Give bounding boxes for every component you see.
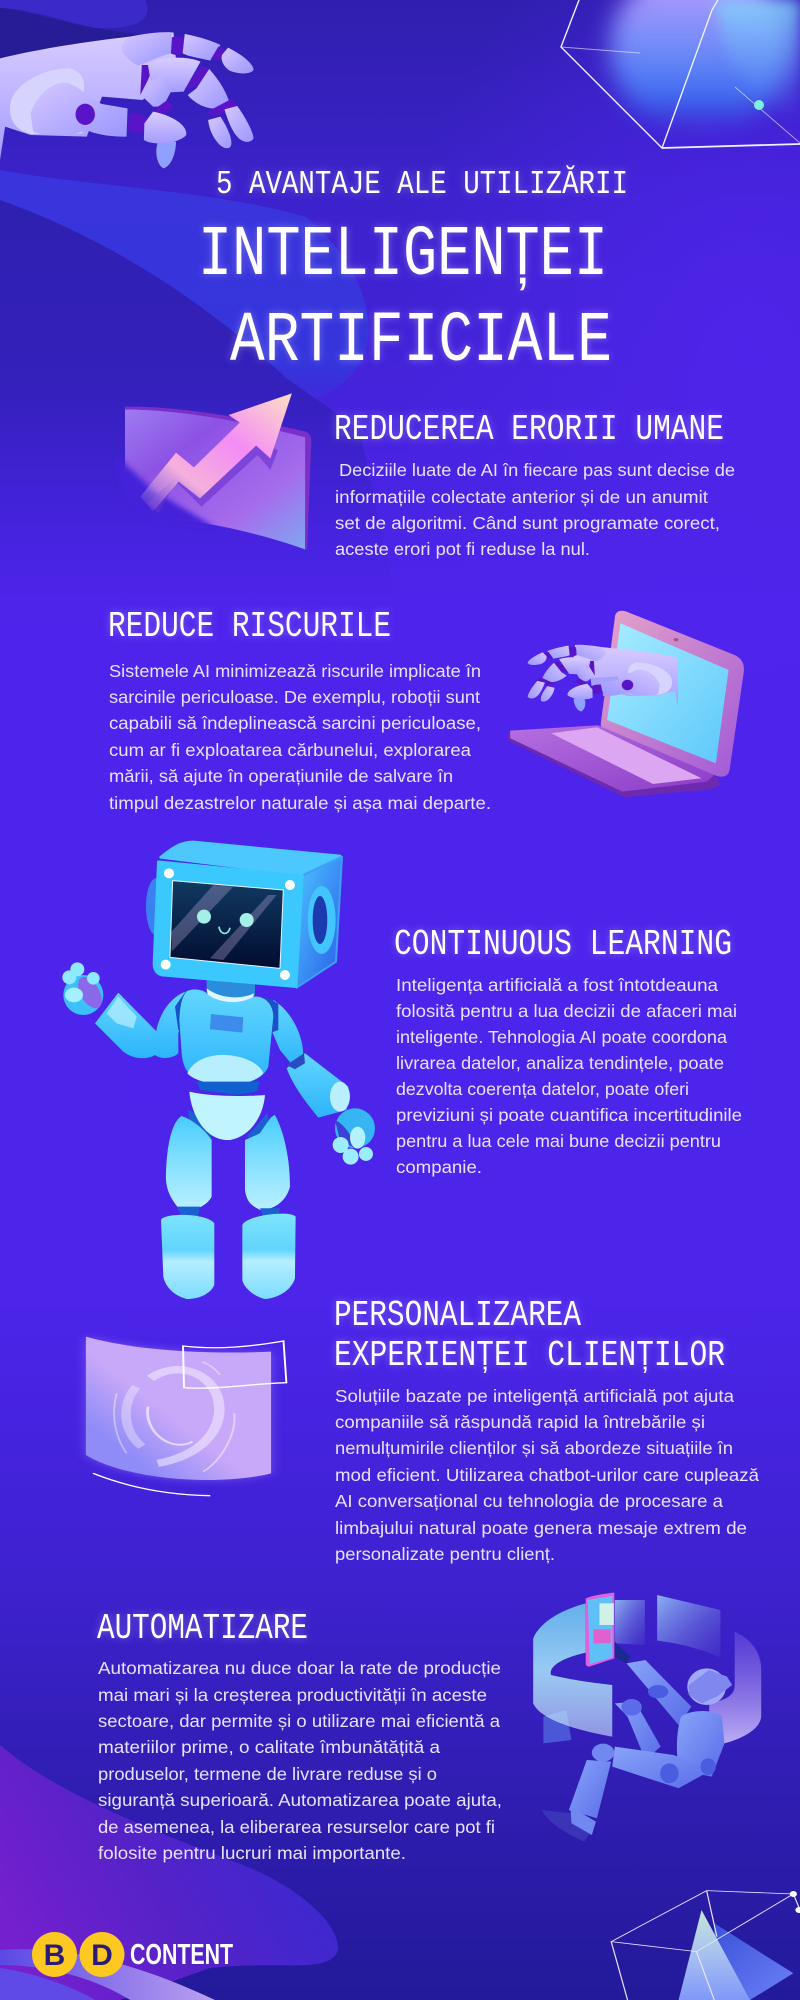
logo: BD content <box>32 1932 233 1977</box>
text block: Sistemele AI minimizează riscurile implicate în <box>109 661 481 681</box>
icon: laptop with robotic hand <box>507 611 744 797</box>
title <box>198 165 628 382</box>
icon: robot with holographic ring <box>533 1593 761 1842</box>
icon: growth arrow chart <box>117 393 311 550</box>
text block: limbajului natural poate genera mesaje extrem de <box>335 1518 747 1538</box>
text block: sarcinile periculoase. De exemplu, roboții sunt <box>109 687 480 707</box>
text block <box>98 1658 502 1863</box>
text block: de asemenea, la eliberarea resurselor care pot fi <box>98 1817 495 1837</box>
text block: dezvolta coerența datelor, poate oferi <box>396 1079 689 1099</box>
panel: automatizare <box>97 1593 761 1863</box>
icon: glass prism bottom right <box>611 1891 800 2000</box>
text block: aceste erori pot fi reduse la nul. <box>335 539 590 559</box>
logo wordmark: CONTENT <box>130 1939 233 1971</box>
main title line one: INTELIGENȚEI <box>198 216 608 296</box>
text block: mod eficient. Utilizarea chatbot-urilor care cuplează <box>335 1465 759 1485</box>
text block: inteligente. Tehnologia AI poate coordona <box>396 1027 727 1047</box>
text block: nemulțumirile clienților și să abordeze situațiile în <box>335 1438 733 1458</box>
text block: Deciziile luate de AI în fiecare pas sunt decise de <box>339 460 735 480</box>
heading: REDUCE RISCURILE <box>108 606 391 647</box>
text block: pentru a lua cele mai bune decizii pentru <box>396 1131 721 1151</box>
main title line two: ARTIFICIALE <box>230 302 612 382</box>
panel: continuous learning <box>62 842 742 1299</box>
text block: livrarea datelor, analiza tendințele, poate <box>396 1053 724 1073</box>
logo letter D: D <box>91 1939 113 1972</box>
text block: materiilor prime, o calitate îmbunătățită a <box>98 1737 440 1757</box>
text block <box>396 975 742 1177</box>
text block: cum ar fi exploatarea cărbunelui, explorarea <box>109 740 471 760</box>
heading <box>334 1295 725 1376</box>
text block: companiile să răspundă rapid la întrebările și <box>335 1412 705 1432</box>
heading: PERSONALIZAREA <box>334 1295 581 1336</box>
text block: set de algoritmi. Când sunt programate corect, <box>335 513 720 533</box>
panel: reducerea erorii umane <box>117 393 735 559</box>
logo letter B: B <box>44 1939 65 1972</box>
text block: folosită pentru a lua decizii de afaceri mai <box>396 1001 737 1021</box>
panel: personalizarea experientei clientilor <box>86 1295 759 1564</box>
text block: mai mari și la creșterea productivității în aceste <box>98 1685 487 1705</box>
text block: folosite pentru lucruri mai importante. <box>98 1843 406 1863</box>
text block: personalizate pentru clienț. <box>335 1544 555 1564</box>
text block: informațiile colectate anterior și de un anumit <box>335 487 708 507</box>
icon: blue robot <box>62 842 375 1299</box>
text block: produselor, termene de livrare reduse și o <box>98 1764 437 1784</box>
text block: Automatizarea nu duce doar la rate de producție <box>98 1658 501 1678</box>
logo letter B <box>32 1932 77 1977</box>
icon: holographic screen <box>86 1337 286 1496</box>
text block: Soluțiile bazate pe inteligență artificială pot ajuta <box>335 1386 734 1406</box>
text block <box>335 1386 759 1564</box>
text block: sectoare, dar permite și o utilizare mai eficientă a <box>98 1711 500 1731</box>
icon: robotic hand <box>0 32 254 168</box>
panel: reduce riscurile <box>108 606 744 813</box>
heading: AUTOMATIZARE <box>97 1608 308 1649</box>
text block: capabili să îndeplinească sarcini periculoase, <box>109 713 481 733</box>
heading: REDUCEREA ERORII UMANE <box>334 409 724 450</box>
text block: companie. <box>396 1157 482 1177</box>
text block <box>109 661 491 813</box>
logo letter D <box>80 1932 124 1977</box>
text block: Inteligența artificială a fost întotdeauna <box>396 975 718 995</box>
text block: mării, să ajute în operațiunile de salvare în <box>109 766 453 786</box>
icon: glass cube top right <box>561 0 800 148</box>
text block: siguranță superioară. Automatizarea poate ajuta, <box>98 1790 502 1810</box>
heading: EXPERIENȚEI CLIENȚILOR <box>334 1335 725 1376</box>
text block <box>335 460 735 559</box>
subtitle: 5 AVANTAJE ALE UTILIZĂRII <box>216 165 628 203</box>
text block: AI conversațional cu tehnologia de procesare a <box>335 1491 723 1511</box>
text block: timpul dezastrelor naturale și așa mai departe. <box>109 793 491 813</box>
text block: previziuni și poate cuantifica incertitudinile <box>396 1105 742 1125</box>
heading: CONTINUOUS LEARNING <box>394 924 732 965</box>
